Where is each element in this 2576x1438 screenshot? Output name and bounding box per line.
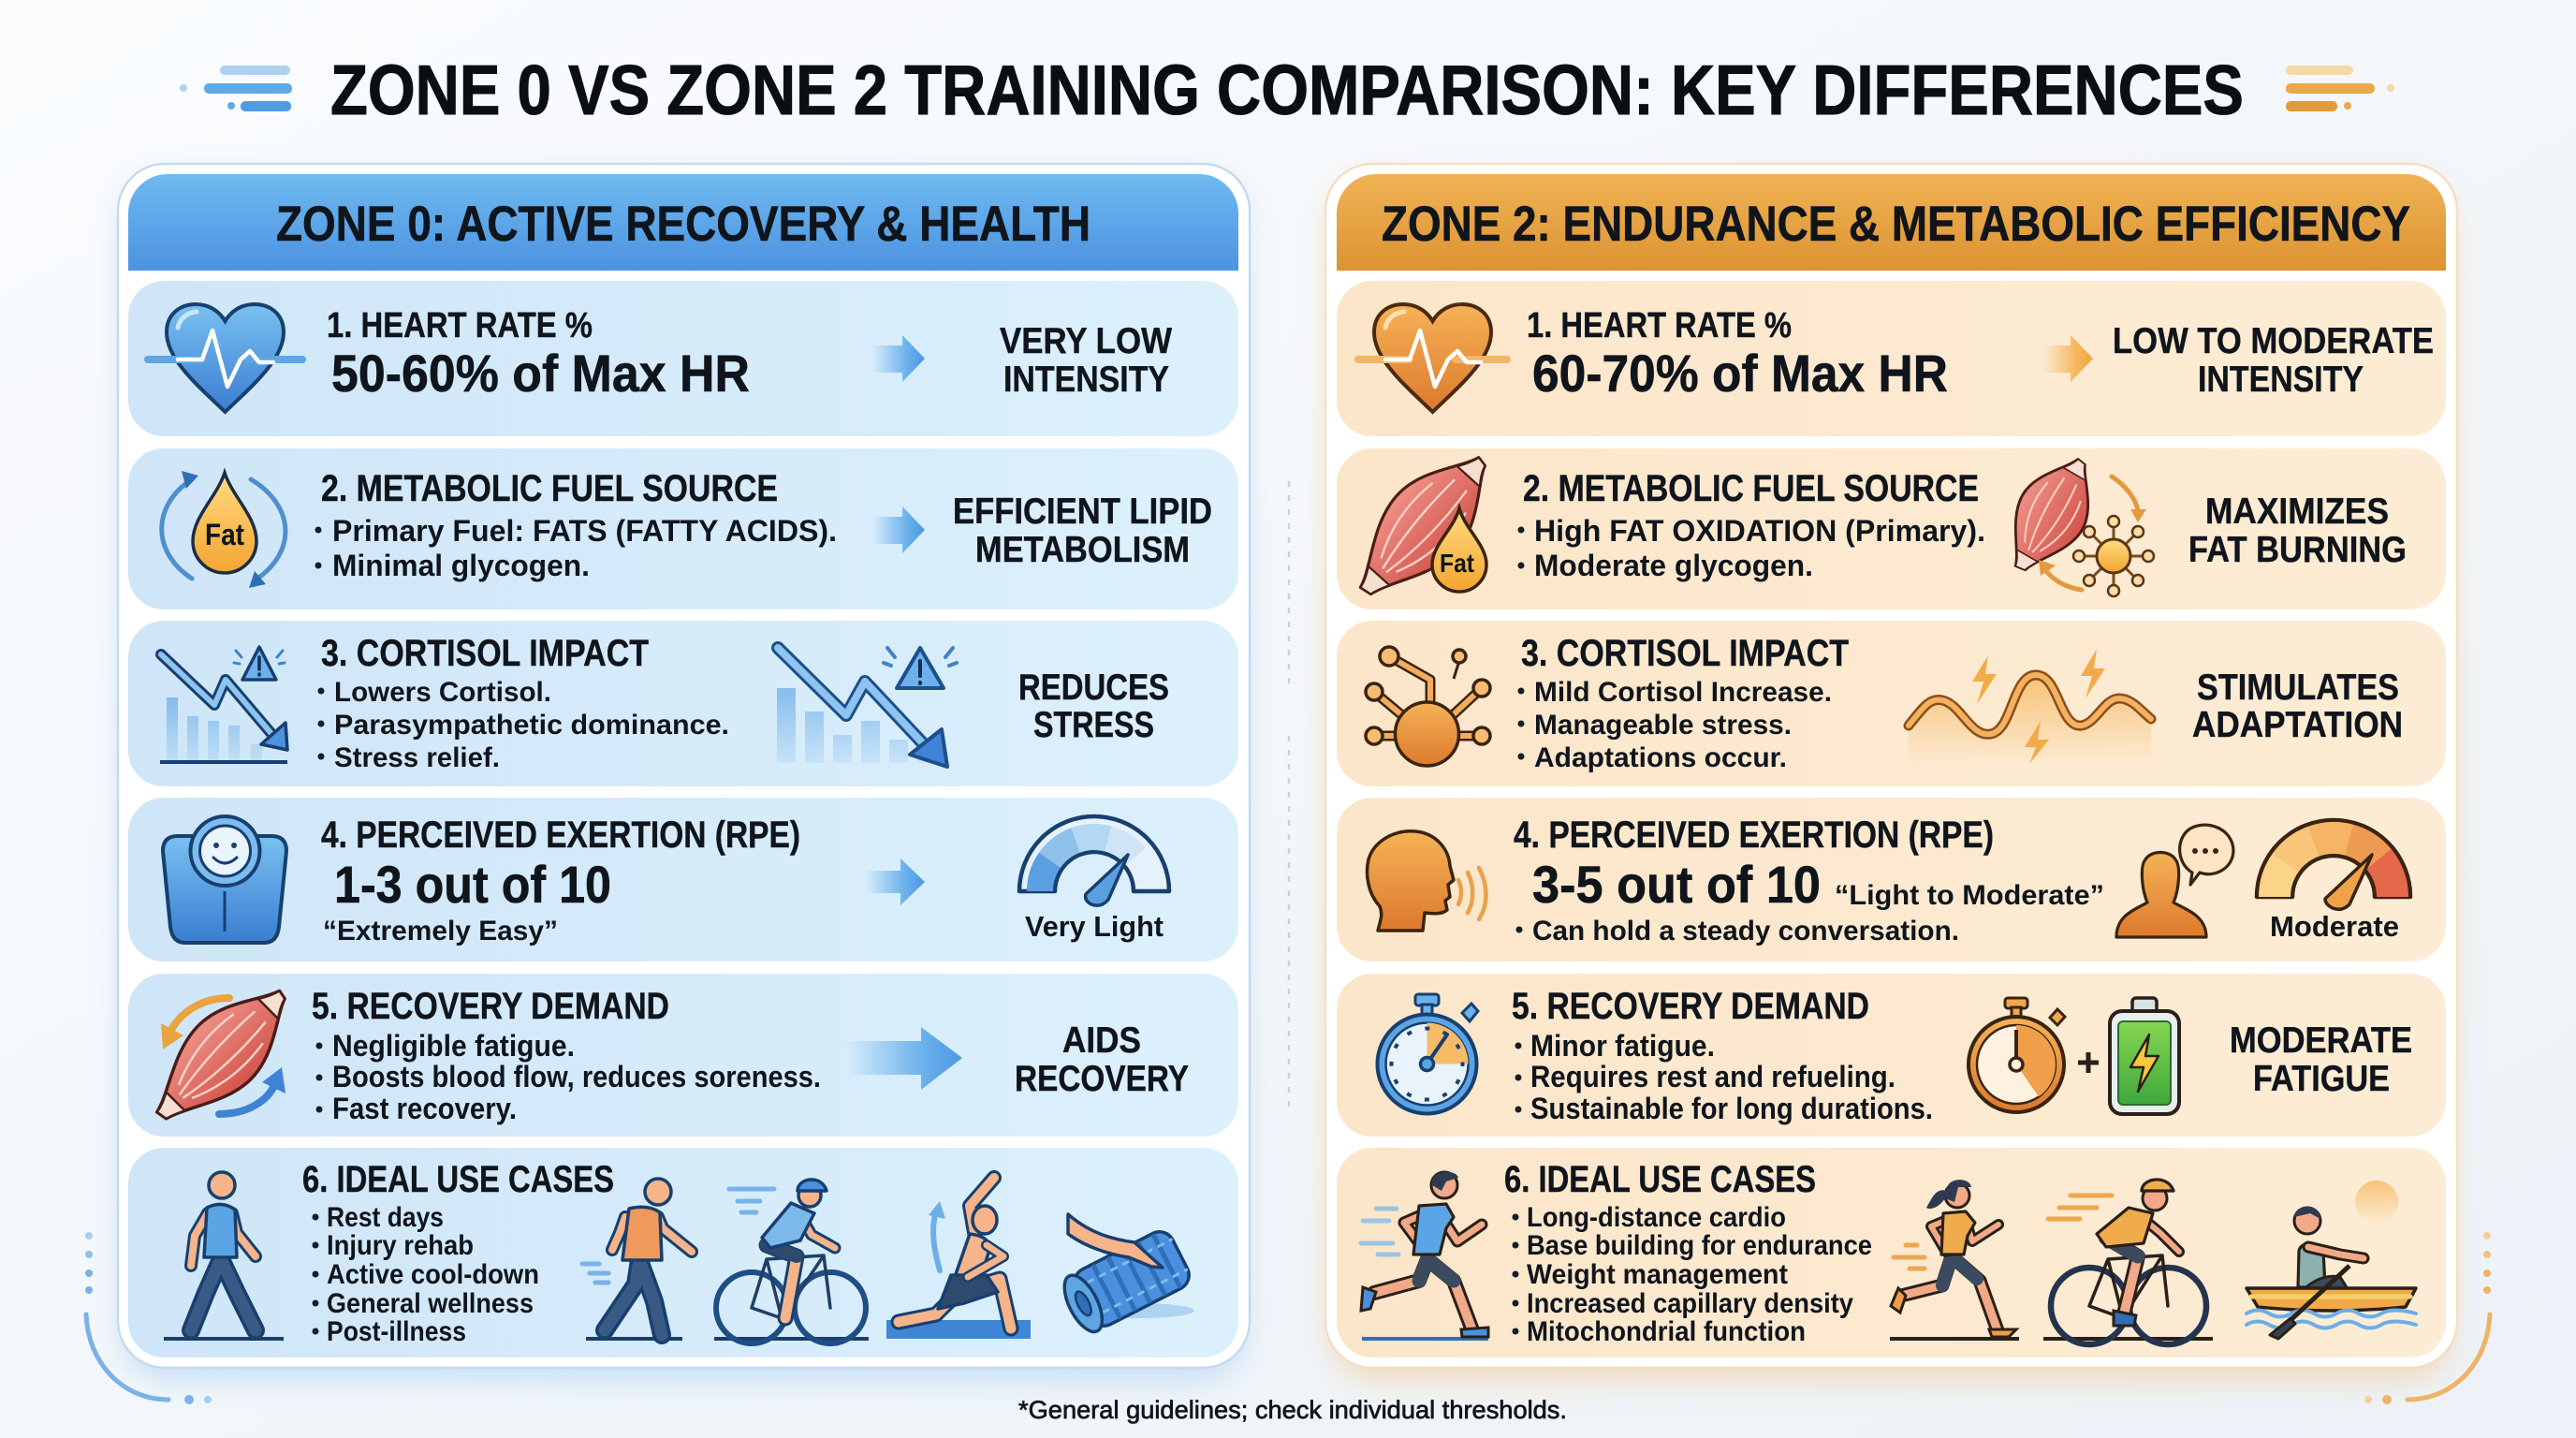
row: metabolic fuel (1335, 433, 2446, 619)
decoration: corner curve right (2364, 1232, 2491, 1404)
row: perceived exertion: 4. PERCEIVED EXERTION (RPE) (321, 814, 800, 856)
outcome: low to moderate intensity (2113, 321, 2434, 400)
panel: zone 0 (118, 164, 1250, 1381)
bullets: Parasympathetic dominance. (334, 710, 729, 741)
bullets: Active cool-down (327, 1259, 539, 1290)
outcome: stimulates adaptation: STIMULATES (2197, 668, 2399, 708)
icon: talking head (1367, 831, 1486, 931)
row: ideal use cases: 6. IDEAL USE CASES (1504, 1159, 1816, 1200)
zone 2 heading bar (1337, 174, 2446, 271)
bullets (318, 677, 729, 773)
row: perceived exertion: 3-5 out of 10 (1532, 855, 1821, 914)
bullets: Lowers Cortisol. (334, 677, 551, 708)
bullets: Mild Cortisol Increase. (1534, 677, 1832, 708)
decoration: orange speed lines beside title (2286, 66, 2394, 111)
row: recovery demand: 5. RECOVERY DEMAND (1512, 986, 1869, 1027)
outcome: low to moderate intensity: INTENSITY (2198, 360, 2364, 400)
icon: muscle and fat drop (1335, 433, 1513, 619)
row: perceived exertion: 1-3 out of 10 (334, 855, 611, 914)
row: recovery demand (1337, 974, 2446, 1137)
outcome: stimulates adaptation: ADAPTATION (2192, 705, 2403, 745)
arrow (866, 858, 925, 905)
icon: cyclist (714, 1180, 869, 1343)
bullets: Injury rehab (327, 1230, 474, 1261)
row: heart rate: 60-70% of Max HR (1532, 344, 1948, 403)
bullets: Base building for endurance (1527, 1230, 1872, 1261)
icon: muscle with circulation arrows (135, 968, 309, 1142)
panel: zone 2 (1325, 164, 2457, 1381)
icon: orange stopwatch (1969, 998, 2065, 1112)
outcome: low to moderate intensity: LOW TO MODERATE (2113, 321, 2434, 361)
row: heart rate: 1. HEART RATE % (1527, 306, 1792, 345)
outcome: stimulates adaptation (2192, 668, 2403, 745)
row: recovery demand: 5. RECOVERY DEMAND (312, 986, 669, 1027)
bullets: High FAT OXIDATION (Primary). (1534, 514, 1985, 548)
outcome: maximizes fat burning: FAT BURNING (2188, 530, 2407, 570)
bullets (316, 1029, 821, 1125)
bullets: Negligible fatigue. (332, 1029, 575, 1063)
outcome: reduces stress: REDUCES (1018, 668, 1169, 708)
bullets: Minimal glycogen. (332, 549, 590, 582)
icon: runner in blue shirt (1361, 1172, 1488, 1339)
outcome: efficient lipid metabolism: METABOLISM (975, 530, 1190, 570)
footnote: *General guidelines; check individual thresholds. (1018, 1396, 1567, 1424)
row: perceived exertion (1337, 798, 2446, 961)
bullets: Minor fatigue. (1530, 1029, 1715, 1063)
outcome: reduces stress: STRESS (1033, 705, 1154, 745)
bullets: Adaptations occur. (1534, 742, 1787, 773)
icon: stress wave with bolts (1909, 649, 2151, 764)
bullets: General wellness (327, 1288, 534, 1319)
icon: foam roller (1057, 1214, 1194, 1338)
bullets (313, 1202, 539, 1347)
outcome: aids recovery (1015, 1020, 1189, 1099)
bullets: Stress relief. (334, 742, 500, 773)
bullets: Post-illness (327, 1316, 466, 1347)
outcome: reduces stress (1018, 668, 1169, 745)
row: heart rate (128, 281, 1238, 436)
bullets: Mitochondrial function (1527, 1316, 1806, 1347)
bullets: Weight management (1527, 1259, 1788, 1290)
outcome: moderate fatigue (2230, 1020, 2412, 1099)
bullets: Primary Fuel: FATS (FATTY ACIDS). (332, 514, 837, 548)
bullets: Requires rest and refueling. (1530, 1060, 1895, 1093)
row: ideal use cases (1337, 1148, 2446, 1357)
bullets: Fast recovery. (332, 1092, 517, 1125)
row: ideal use cases (128, 1148, 1238, 1357)
decoration: blue speed lines beside title (180, 66, 292, 111)
outcome: maximizes fat burning: MAXIMIZES (2205, 492, 2389, 532)
gauge: very light: Very Light (1025, 910, 1164, 943)
outcome: moderate fatigue: MODERATE (2230, 1020, 2412, 1061)
outcome: aids recovery: RECOVERY (1015, 1059, 1189, 1099)
row: ideal use cases: 6. IDEAL USE CASES (302, 1159, 614, 1200)
icon: blue heart (148, 304, 302, 412)
row: cortisol: 3. CORTISOL IMPACT (1521, 633, 1849, 674)
outcome: very low intensity: VERY LOW (1000, 321, 1172, 361)
icon: fat drop with cycle arrows (162, 471, 285, 588)
bullets: Manageable stress. (1534, 710, 1792, 741)
icon: walking person (164, 1172, 284, 1339)
row: metabolic fuel: 2. METABOLIC FUEL SOURCE (321, 468, 778, 509)
icon: fat drop with cycle arrows: Fat (205, 518, 244, 551)
bullets: Sustainable for long durations. (1530, 1092, 1933, 1125)
row: cortisol (128, 621, 1238, 786)
bullets: Moderate glycogen. (1534, 549, 1813, 582)
bullets (1513, 1202, 1872, 1347)
bullets (1518, 514, 1985, 582)
icon: muscle and fat drop: Fat (1440, 549, 1474, 578)
row: perceived exertion: 4. PERCEIVED EXERTION (RPE) (1514, 814, 1994, 856)
outcome: aids recovery: AIDS (1062, 1020, 1141, 1061)
icon: plus sign (2078, 1052, 2099, 1073)
row: perceived exertion: “Extremely Easy” (323, 916, 558, 946)
row: heart rate: 1. HEART RATE % (327, 306, 593, 345)
icon: charging battery (2110, 998, 2179, 1114)
arrow (872, 335, 925, 382)
gauge: very light (1019, 816, 1169, 943)
bullets (315, 514, 837, 582)
bullet: Can hold a steady conversation. (1532, 916, 1959, 946)
row: cortisol (1337, 621, 2446, 786)
icon: muscle to fat molecule cycle (1990, 444, 2154, 596)
arrow (2043, 335, 2093, 382)
icon: small declining chart (160, 647, 287, 762)
icon: orange cyclist (2043, 1180, 2213, 1344)
outcome: moderate fatigue: FATIGUE (2253, 1059, 2390, 1099)
bullets: Rest days (327, 1202, 444, 1233)
row: perceived exertion (128, 798, 1238, 961)
bullets: Increased capillary density (1527, 1288, 1853, 1319)
icon: female runner (1890, 1180, 2019, 1339)
icon: blue stopwatch (1378, 994, 1478, 1114)
icon: cortisol molecule (1366, 647, 1490, 766)
icon: large declining chart (777, 648, 957, 767)
icon: lunge stretch (886, 1178, 1031, 1339)
icon: person with speech bubble (2116, 825, 2233, 937)
row: recovery demand (128, 968, 1238, 1142)
zone 0 heading bar (128, 174, 1238, 271)
arrow (846, 1027, 962, 1090)
row: metabolic fuel (128, 448, 1238, 609)
bullets: Long-distance cardio (1527, 1202, 1786, 1233)
bullets (1518, 677, 1832, 773)
bullets: Boosts blood flow, reduces soreness. (332, 1060, 821, 1093)
outcome: efficient lipid metabolism: EFFICIENT LIPID (953, 492, 1212, 532)
row: heart rate: 50-60% of Max HR (331, 344, 750, 403)
icon: brisk walker (582, 1179, 692, 1339)
icon: orange heart (1358, 304, 1507, 412)
gauge: moderate: Moderate (2270, 910, 2399, 943)
outcome: very low intensity (1000, 321, 1172, 400)
title: ZONE 0 VS ZONE 2 TRAINING COMPARISON: KEY DIFFERENCES (330, 51, 2244, 129)
icon: scale with smiley (163, 816, 286, 943)
row: cortisol: 3. CORTISOL IMPACT (321, 633, 649, 674)
outcome: maximizes fat burning (2188, 492, 2407, 570)
outcome: efficient lipid metabolism (953, 492, 1212, 570)
icon: rower in kayak (2247, 1181, 2416, 1339)
row: heart rate (1337, 281, 2446, 436)
arrow (872, 506, 925, 553)
gauge: moderate (2257, 820, 2410, 943)
outcome: very low intensity: INTENSITY (1003, 360, 1169, 400)
row: perceived exertion: “Light to Moderate” (1835, 880, 2104, 911)
zone 0 heading bar: ZONE 0: ACTIVE RECOVERY & HEALTH (276, 197, 1090, 252)
row: metabolic fuel: 2. METABOLIC FUEL SOURCE (1523, 468, 1979, 509)
zone 2 heading bar: ZONE 2: ENDURANCE & METABOLIC EFFICIENCY (1382, 197, 2410, 252)
bullets (1515, 1029, 1933, 1125)
decoration: corner curve left (85, 1232, 212, 1404)
